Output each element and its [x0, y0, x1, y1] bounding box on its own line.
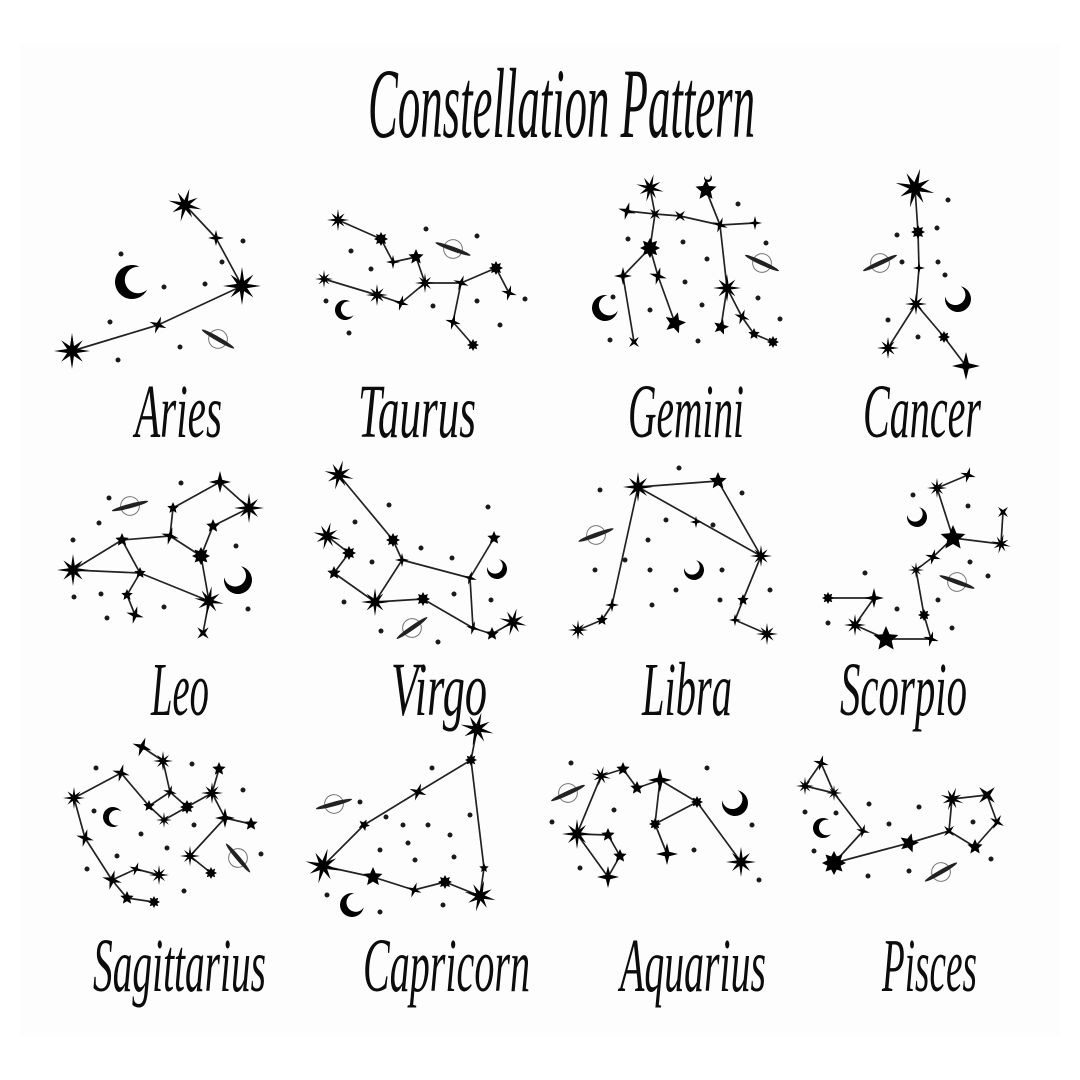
icon: small crescent	[703, 173, 713, 183]
constellation: Sagittarius	[63, 734, 261, 908]
constellation: Leo	[57, 471, 264, 644]
constellation: Scorpio	[822, 465, 1013, 650]
constellation: Cancer	[859, 164, 980, 380]
constellation: Aquarius	[547, 762, 759, 888]
constellation: Virgo	[310, 457, 530, 646]
label: Leo: Leo	[150, 648, 209, 732]
constellation: Aries	[54, 184, 261, 369]
constellation: Libra	[568, 468, 778, 645]
constellation: Pisces	[796, 753, 1008, 889]
label: Aries: Aries	[132, 370, 222, 454]
label: Aquarius: Aquarius	[617, 924, 766, 1008]
constellation: Gemini	[592, 171, 783, 352]
label: Capricorn: Capricorn	[363, 924, 530, 1008]
label: Sagittarius: Sagittarius	[93, 924, 266, 1008]
constellation: Capricorn	[301, 708, 500, 917]
label: Virgo: Virgo	[391, 648, 487, 732]
text: Pisces	[882, 924, 977, 1008]
label: Taurus: Taurus	[358, 370, 476, 454]
label: Scorpio: Scorpio	[840, 648, 967, 732]
label: Gemini: Gemini	[628, 370, 744, 454]
label: Libra: Libra	[641, 648, 732, 732]
constellation: Taurus	[315, 209, 525, 351]
